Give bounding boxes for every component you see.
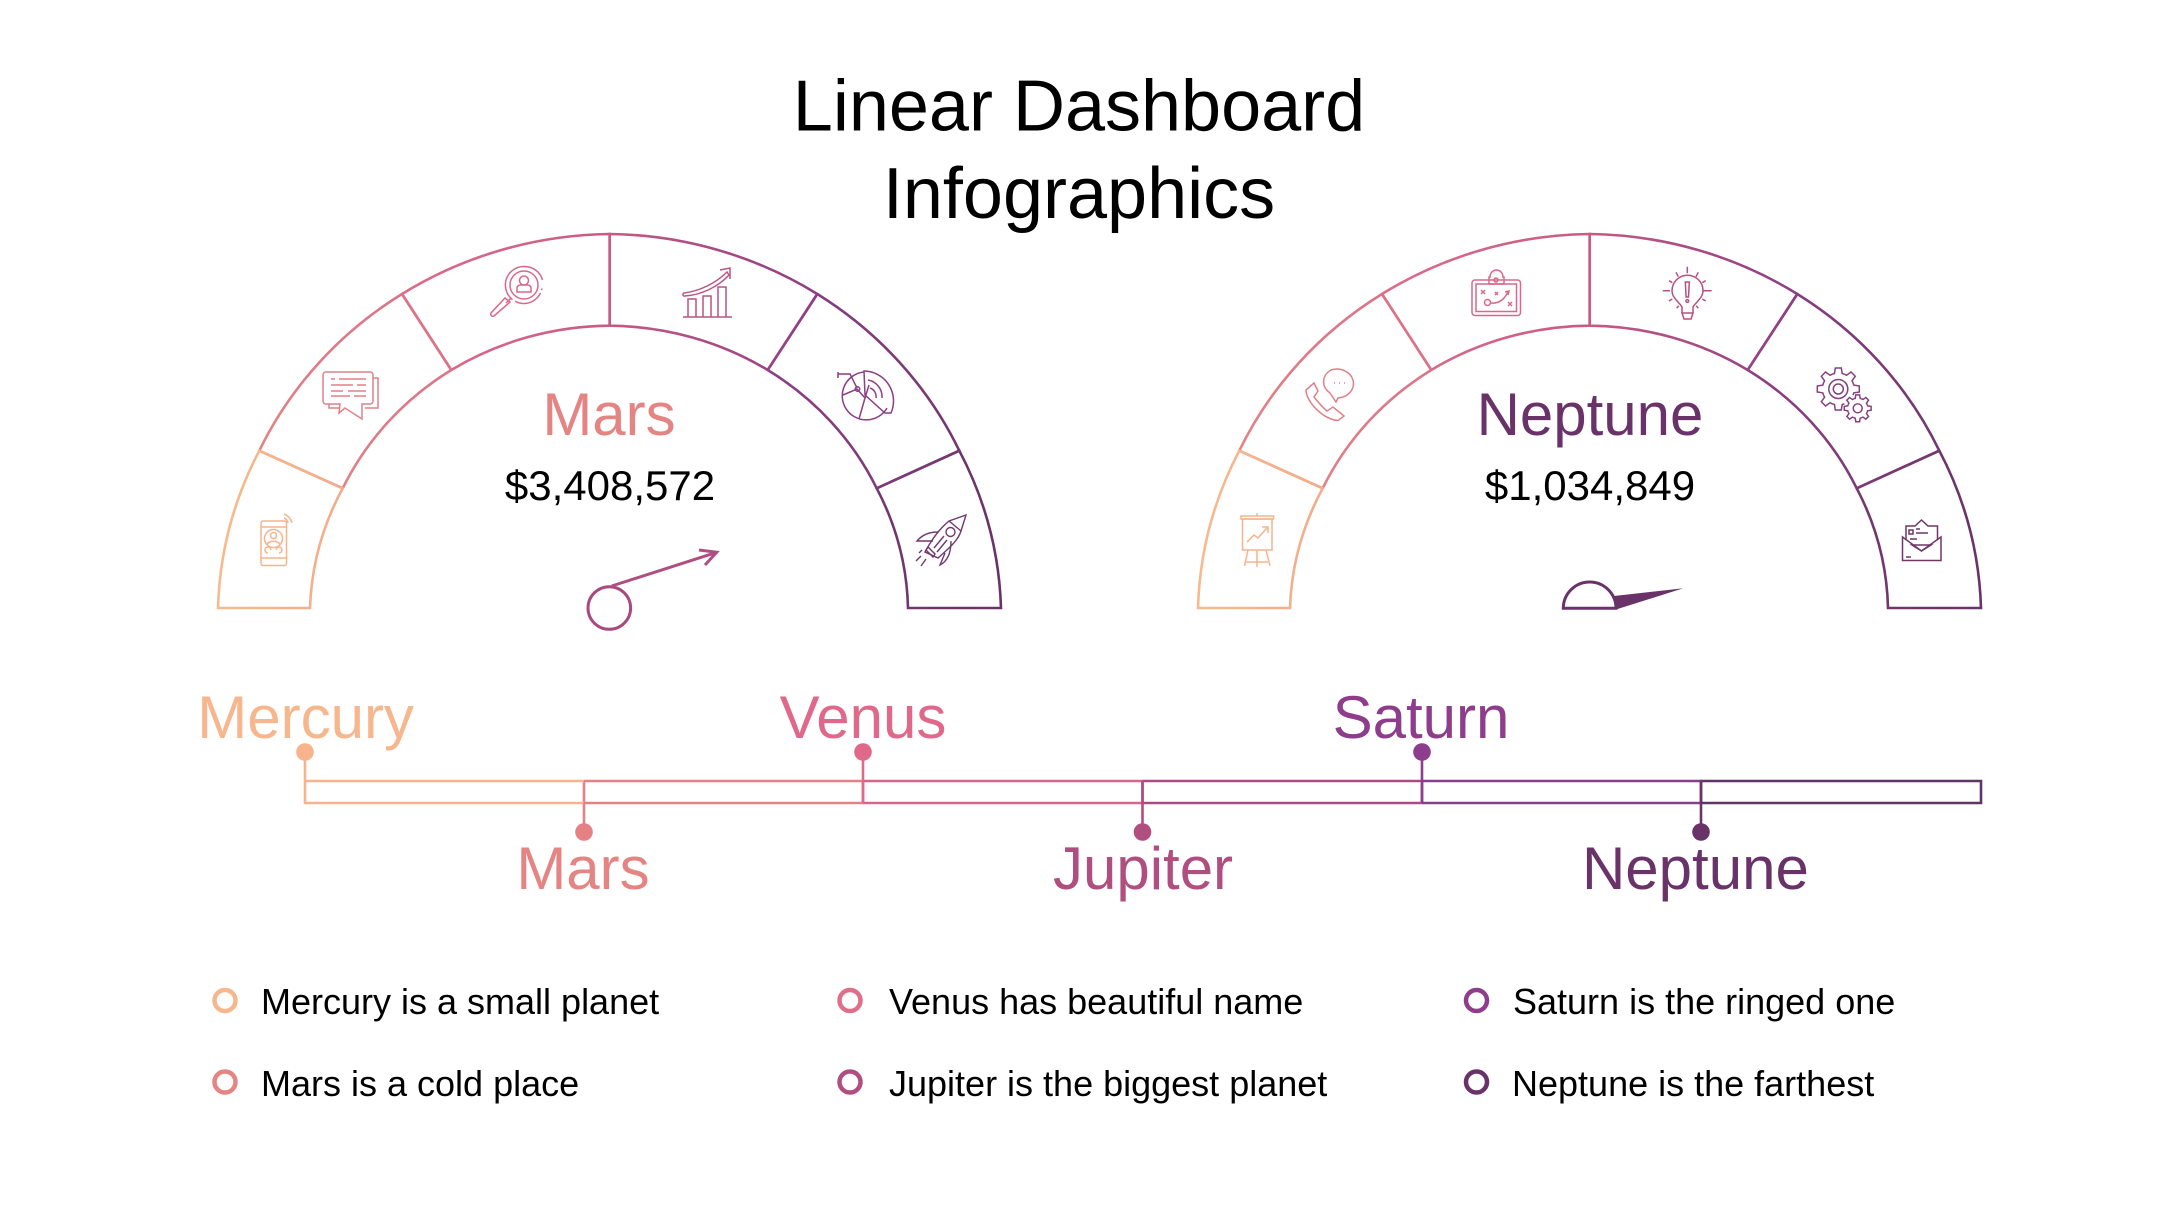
pin: Mercury bbox=[296, 743, 314, 781]
legend item: Neptune: Neptune is the farthest bbox=[1512, 1063, 1874, 1104]
label: Mercury: Mercury bbox=[197, 684, 414, 751]
timeline segment: Neptune bbox=[1701, 781, 1981, 803]
label: Mars: Mars bbox=[516, 835, 650, 902]
gauge segment 6 bbox=[1857, 451, 1981, 608]
gauge segment 5 bbox=[768, 294, 959, 488]
legend bbox=[214, 981, 1895, 1104]
timeline segment: Mars bbox=[584, 781, 863, 803]
legend item: Saturn: Saturn is the ringed one bbox=[1513, 981, 1895, 1022]
legend item: Mars: Mars is a cold place bbox=[261, 1063, 579, 1104]
title: Infographics bbox=[883, 154, 1275, 234]
gauge segment 2 bbox=[259, 294, 451, 488]
timeline segment: Jupiter bbox=[1142, 781, 1422, 803]
gauge segment 1 bbox=[218, 451, 343, 608]
text: Neptune gauge name: Neptune bbox=[1477, 381, 1703, 448]
pin: Saturn bbox=[1413, 743, 1431, 803]
gauge segment 3 bbox=[402, 234, 610, 370]
title: Linear Dashboard bbox=[793, 66, 1365, 146]
text: Mars gauge name: Mars bbox=[542, 381, 676, 448]
icon: phone with speech bubble bbox=[1306, 369, 1353, 420]
icon: radar chart bbox=[838, 371, 894, 420]
icon: gears bbox=[1817, 368, 1871, 422]
legend item: Jupiter: Jupiter is the biggest planet bbox=[889, 1063, 1327, 1104]
icon: chat message bbox=[323, 372, 378, 419]
legend item: Venus: Venus has beautiful name bbox=[889, 981, 1303, 1022]
timeline segment: Saturn bbox=[1422, 781, 1701, 803]
pin: Neptune bbox=[1692, 781, 1710, 841]
timeline segment: Mercury bbox=[305, 781, 584, 803]
pin: Mars bbox=[575, 803, 593, 841]
label: Saturn: Saturn bbox=[1333, 684, 1509, 751]
pin: Jupiter bbox=[1134, 781, 1151, 841]
legend item: Mercury: Mercury is a small planet bbox=[261, 981, 659, 1022]
icon: rising bar chart bbox=[683, 268, 732, 317]
icon: light bulb with exclamation bbox=[1663, 267, 1712, 319]
panel: Neptune gauge bbox=[1198, 234, 1981, 608]
needle: Neptune gauge pointer bbox=[1563, 582, 1683, 610]
gauge segment 4 bbox=[610, 234, 817, 370]
label: Venus: Venus bbox=[780, 684, 946, 751]
gauge segment 2 bbox=[1239, 294, 1431, 488]
pin: Venus bbox=[854, 743, 872, 803]
gauge segment 4 bbox=[1590, 234, 1797, 370]
text: Neptune gauge value: $1,034,849 bbox=[1485, 462, 1695, 509]
icon: magnifier with person bbox=[491, 266, 542, 316]
label: Neptune: Neptune bbox=[1582, 835, 1809, 902]
icon: smartphone contact bbox=[261, 514, 292, 566]
icon: tactics clipboard bbox=[1472, 270, 1520, 316]
linear timeline bar bbox=[305, 781, 1981, 803]
text: Mars gauge value: $3,408,572 bbox=[505, 462, 715, 509]
gauge segment 5 bbox=[1748, 294, 1939, 488]
timeline segment: Venus bbox=[863, 781, 1142, 803]
panel: Mars gauge bbox=[218, 234, 1001, 608]
icon: envelope with letter bbox=[1902, 520, 1941, 560]
needle: Mars gauge arrow bbox=[588, 550, 717, 629]
icon: rocket bbox=[916, 515, 966, 566]
gauge segment 6 bbox=[877, 451, 1001, 608]
gauge segment 3 bbox=[1382, 234, 1590, 370]
icon: presentation easel bbox=[1241, 513, 1274, 567]
label: Jupiter: Jupiter bbox=[1053, 835, 1233, 902]
gauge segment 1 bbox=[1198, 451, 1323, 608]
